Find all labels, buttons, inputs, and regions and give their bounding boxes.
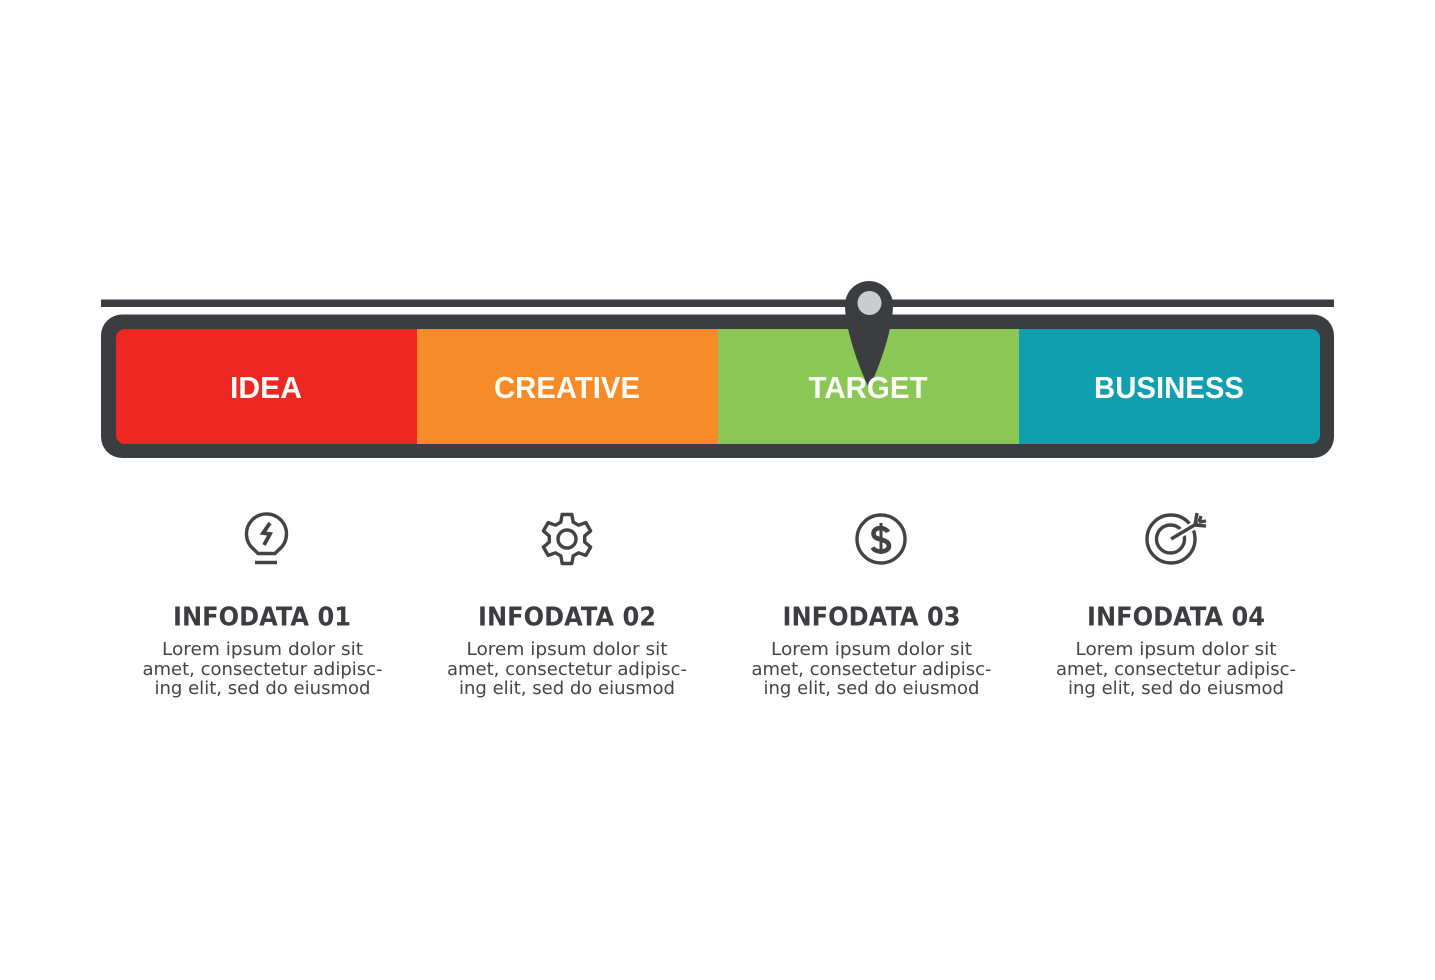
segment: creative bbox=[417, 329, 718, 444]
icon: dollar coin bbox=[857, 515, 905, 563]
heading: INFODATA 01 bbox=[173, 602, 351, 632]
body text bbox=[447, 640, 687, 699]
body text: Lorem ipsum dolor sit bbox=[466, 640, 668, 660]
progress frame with segments bbox=[101, 314, 1334, 458]
timeline bar bbox=[101, 300, 1334, 307]
column 2 text bbox=[447, 602, 687, 699]
label: target: TARGET bbox=[808, 370, 928, 405]
body text bbox=[142, 640, 382, 699]
body text: ing elit, sed do eiusmod bbox=[1068, 679, 1284, 699]
label: business: BUSINESS bbox=[1094, 370, 1244, 405]
label: idea: IDEA bbox=[230, 370, 302, 405]
column 1 text bbox=[142, 602, 382, 699]
body text: Lorem ipsum dolor sit bbox=[771, 640, 972, 660]
heading: INFODATA 02 bbox=[478, 602, 656, 632]
segment: target bbox=[718, 329, 1019, 444]
icon: light bulb bbox=[246, 514, 286, 562]
body text: ing elit, sed do eiusmod bbox=[764, 679, 980, 699]
body text: ing elit, sed do eiusmod bbox=[154, 679, 370, 699]
label: creative: CREATIVE bbox=[494, 370, 640, 405]
body text bbox=[752, 640, 992, 699]
body text: ing elit, sed do eiusmod bbox=[459, 679, 675, 699]
segment: business bbox=[1019, 329, 1320, 444]
icon: target with arrow bbox=[1147, 513, 1206, 563]
segment: idea bbox=[116, 329, 417, 444]
icon: gear bbox=[543, 514, 591, 564]
body text: amet, consectetur adipisc- bbox=[752, 660, 992, 680]
body text: amet, consectetur adipisc- bbox=[1056, 660, 1296, 680]
body text: Lorem ipsum dolor sit bbox=[162, 640, 363, 660]
column 4 text bbox=[1056, 602, 1296, 699]
heading: INFODATA 04 bbox=[1087, 602, 1265, 632]
body text: amet, consectetur adipisc- bbox=[142, 660, 382, 680]
location pin marker bbox=[845, 281, 893, 388]
body text bbox=[1056, 640, 1296, 699]
body text: Lorem ipsum dolor sit bbox=[1076, 640, 1277, 660]
column 3 text bbox=[752, 602, 992, 699]
body text: amet, consectetur adipisc- bbox=[447, 660, 687, 680]
heading: INFODATA 03 bbox=[782, 602, 960, 632]
